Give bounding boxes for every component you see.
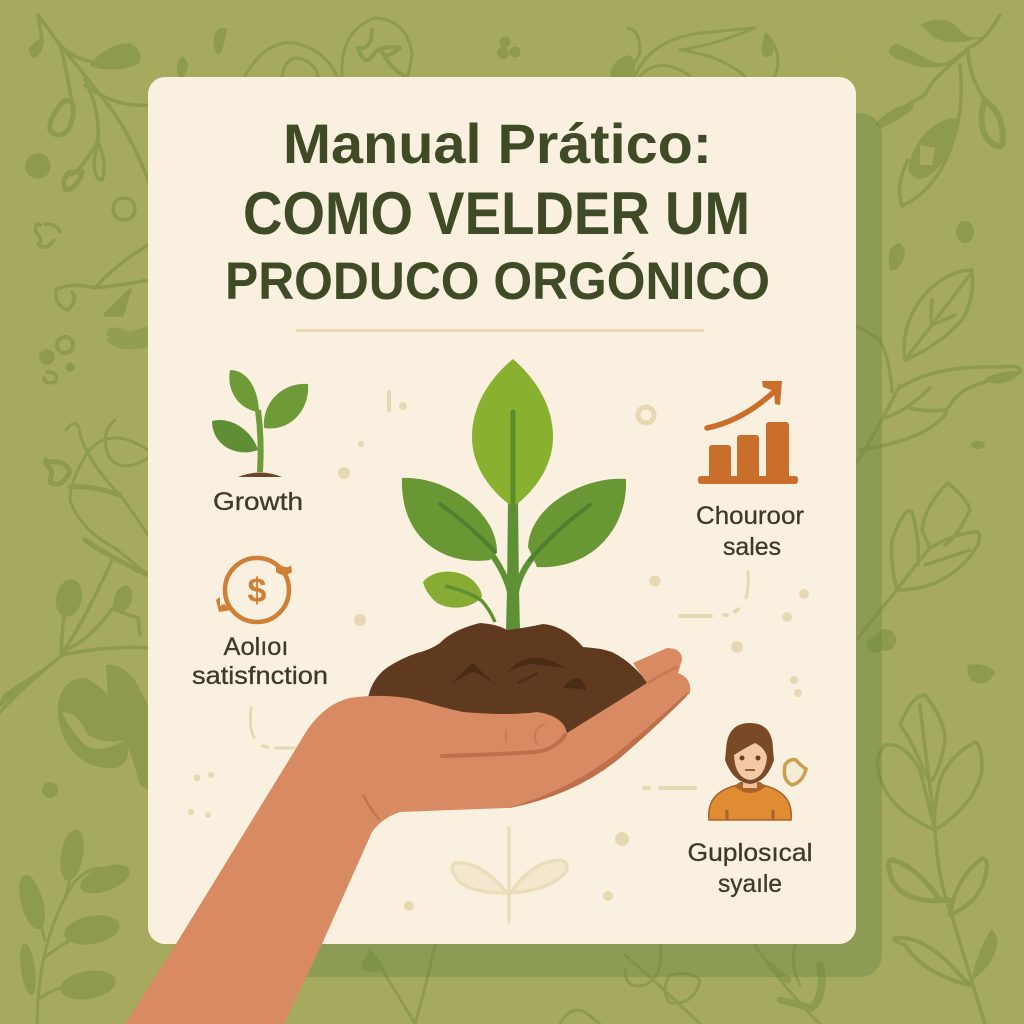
icon: sales bar chart (698, 381, 798, 484)
title (225, 112, 770, 311)
label: person (688, 839, 812, 898)
label: person: syaıle (718, 870, 782, 898)
top centre-right vine (610, 28, 778, 86)
main card (148, 77, 856, 944)
label: satisfaction (192, 633, 328, 690)
icon: faint leaf ornament (452, 828, 567, 922)
label: person: Guplosıcal (688, 839, 812, 867)
lower-left looping vine (45, 420, 148, 575)
top-right branch (875, 15, 1003, 270)
icon: dollar cycle (216, 558, 292, 622)
title: COMO VELDER UM (243, 180, 750, 247)
hand (125, 648, 690, 1024)
soil (368, 623, 660, 745)
card shadow (180, 113, 882, 977)
decorative dots and dashes (188, 390, 809, 911)
title: Manual Prático: (283, 112, 712, 175)
label: sales (696, 502, 804, 561)
label: satisfaction: satisfnction (192, 662, 328, 690)
top loops (179, 18, 520, 76)
large dark leaf left (42, 665, 148, 798)
icon: person (709, 723, 806, 820)
middle-left branch (41, 245, 148, 383)
connector dashes (250, 572, 748, 748)
plant (402, 359, 626, 630)
bottom-right sprig (878, 695, 998, 1024)
label: Growth: Growth (213, 488, 303, 516)
label: sales: Chouroor (696, 502, 804, 530)
label: satisfaction: Aolıoı (224, 633, 288, 661)
label: sales: sales (723, 533, 781, 561)
icon: growth sprout (212, 370, 308, 477)
illustration: seedling in hand (125, 359, 690, 1024)
title: PRODUCO ORGÓNICO (225, 251, 770, 311)
bottom centre sprigs (362, 945, 822, 1024)
icon: dollar cycle: $ (248, 572, 267, 610)
divider (296, 329, 704, 332)
right foliage lower (858, 483, 995, 683)
ring ornament (638, 407, 654, 423)
bottom-left sprig (14, 827, 134, 1024)
top-left branch (27, 15, 150, 247)
middle-right branch (855, 270, 1022, 465)
lower-left sprig (0, 560, 148, 712)
